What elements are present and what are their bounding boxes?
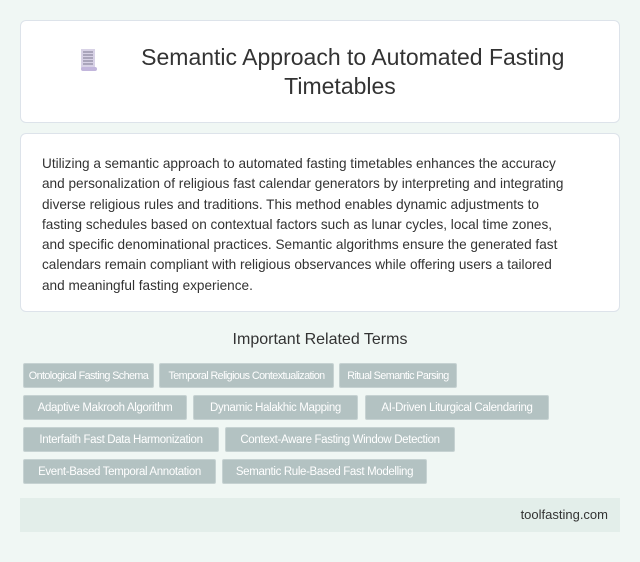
tag: Dynamic Halakhic Mapping bbox=[210, 402, 341, 414]
tag bbox=[225, 427, 455, 452]
tag: AI-Driven Liturgical Calendaring bbox=[381, 402, 533, 414]
tag bbox=[222, 459, 427, 484]
tag bbox=[23, 363, 154, 388]
tag: Event-Based Temporal Annotation bbox=[38, 466, 201, 478]
title: Timetables bbox=[284, 73, 396, 99]
description text: and personalization of religious fast calendar generators by interpreting and integrating bbox=[42, 176, 563, 191]
tag bbox=[23, 459, 216, 484]
terms heading: Important Related Terms bbox=[233, 331, 407, 348]
tag bbox=[339, 363, 457, 388]
tag: Adaptive Makrooh Algorithm bbox=[38, 402, 172, 414]
footer bbox=[20, 498, 620, 532]
description text: and meaningful fasting experience. bbox=[42, 278, 253, 293]
tag: Temporal Religious Contextualization bbox=[168, 370, 325, 382]
description text: Utilizing a semantic approach to automated fasting timetables enhances the accuracy bbox=[42, 156, 556, 171]
tag: Context-Aware Fasting Window Detection bbox=[240, 434, 440, 446]
header card bbox=[20, 20, 620, 123]
description text: diverse religious rules and traditions. This method enables dynamic adjustments to bbox=[42, 197, 539, 212]
tag bbox=[365, 395, 549, 420]
terms tags bbox=[23, 363, 549, 484]
tag: Ritual Semantic Parsing bbox=[347, 370, 449, 382]
tag bbox=[159, 363, 334, 388]
description card bbox=[20, 133, 620, 312]
description text: fasting schedules based on contextual factors such as lunar cycles, local time zones, bbox=[42, 217, 552, 232]
tag bbox=[23, 427, 219, 452]
description text: calendars remain compliant with religious observances while offering users a tailored bbox=[42, 257, 552, 272]
tag: Semantic Rule-Based Fast Modelling bbox=[236, 466, 413, 478]
tag: Interfaith Fast Data Harmonization bbox=[39, 434, 203, 446]
tag bbox=[193, 395, 358, 420]
tag bbox=[23, 395, 187, 420]
description text bbox=[42, 156, 563, 293]
footer text: toolfasting.com bbox=[521, 507, 608, 522]
title: Semantic Approach to Automated Fasting bbox=[141, 44, 564, 70]
title bbox=[141, 44, 564, 99]
description text: and specific denominational practices. Semantic algorithms ensure the generated fast bbox=[42, 237, 557, 252]
icon: scroll bbox=[81, 49, 97, 71]
tag: Ontological Fasting Schema bbox=[29, 370, 148, 382]
